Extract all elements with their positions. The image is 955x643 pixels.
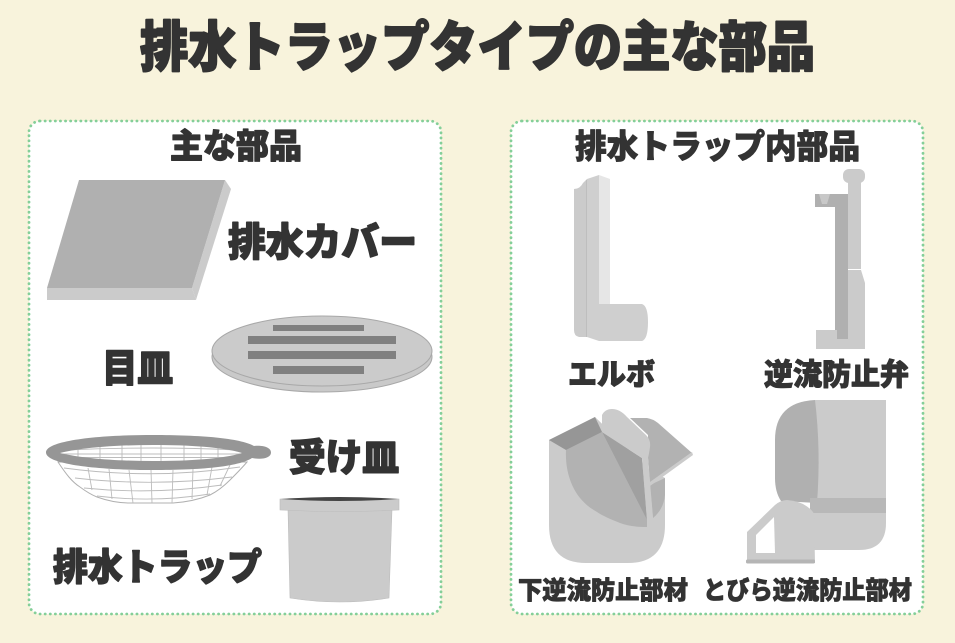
title: 排水トラップタイプの主な部品: [140, 18, 815, 78]
label: drain trap: 排水トラップ: [53, 547, 262, 588]
label: drain cover: 排水カバー: [228, 222, 417, 265]
label: receiving tray: 受け皿: [289, 438, 399, 480]
panel: main parts: [29, 121, 441, 614]
label: bottom check member: 下逆流防止部材: [518, 577, 688, 605]
heading: internal parts: 排水トラップ内部品: [575, 128, 860, 165]
heading: main parts: 主な部品: [170, 128, 302, 166]
label: grate: 目皿: [102, 348, 173, 391]
icon: grate: [212, 316, 432, 392]
panel: internal parts: [511, 121, 923, 614]
icon: drain trap: [280, 497, 399, 602]
icon: strainer basket: [46, 435, 271, 503]
icon: door check member: [746, 400, 886, 564]
label: check valve: 逆流防止弁: [764, 359, 909, 392]
icon: drain cover: [47, 180, 231, 300]
label: door check member: とびら逆流防止部材: [703, 577, 912, 605]
icon: bottom check member: [549, 409, 693, 563]
label: elbow: エルボ: [568, 359, 655, 392]
icon: check valve: [815, 169, 865, 349]
icon: elbow: [574, 175, 648, 341]
